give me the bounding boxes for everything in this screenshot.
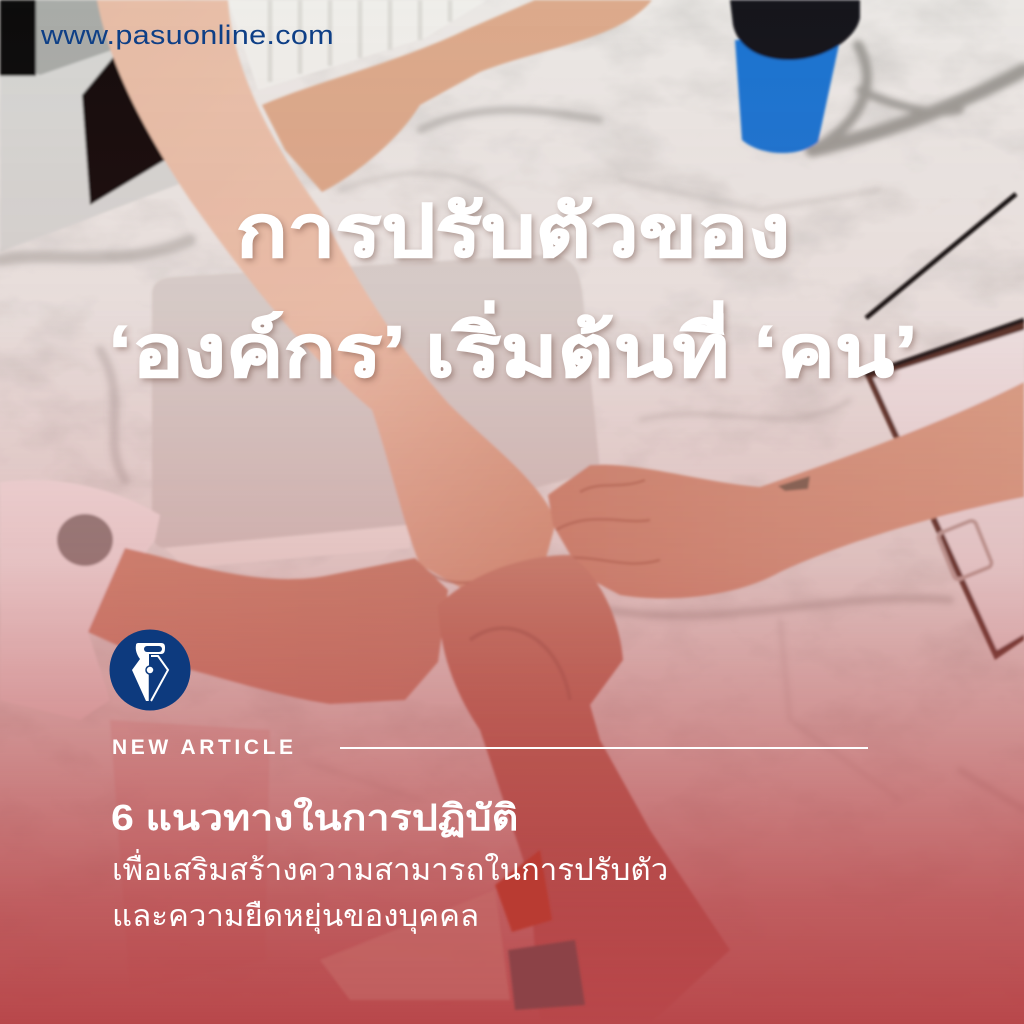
laptop bbox=[152, 255, 600, 548]
divider line bbox=[340, 747, 868, 749]
description text bbox=[112, 849, 668, 934]
website url: www.pasuonline.com bbox=[41, 20, 334, 50]
title line 2: ‘องค์กร’ เริ่มต้นที่ ‘คน’ bbox=[108, 312, 918, 392]
right arm bbox=[548, 382, 1024, 598]
forearm top bbox=[262, 0, 652, 192]
subheading: 6 แนวทางในการปฏิบัติ bbox=[111, 797, 518, 838]
bottom hand bbox=[438, 555, 730, 1024]
title line 1: การปรับตัวของ bbox=[236, 192, 790, 272]
main arm bbox=[97, 0, 556, 590]
color swatches bbox=[320, 850, 585, 1010]
left sleeve bbox=[0, 480, 160, 720]
icon: fountain pen logo bbox=[110, 630, 190, 710]
marble veins bbox=[0, 45, 1024, 810]
finger creases bbox=[420, 480, 660, 583]
paper lower left bbox=[110, 720, 270, 990]
white striped top bbox=[228, 0, 487, 90]
description text: และความยืดหยุ่นของบุคคล bbox=[112, 900, 479, 933]
description text: เพื่อเสริมสร้างความสามารถในการปรับตัว bbox=[112, 854, 668, 887]
new article label: NEW ARTICLE bbox=[112, 736, 297, 759]
cup bbox=[735, 40, 840, 153]
clipboard bbox=[865, 320, 1024, 660]
title bbox=[108, 192, 918, 392]
top-left floor bbox=[0, 0, 190, 252]
pencil bbox=[866, 194, 1016, 318]
left arm bbox=[88, 548, 448, 704]
